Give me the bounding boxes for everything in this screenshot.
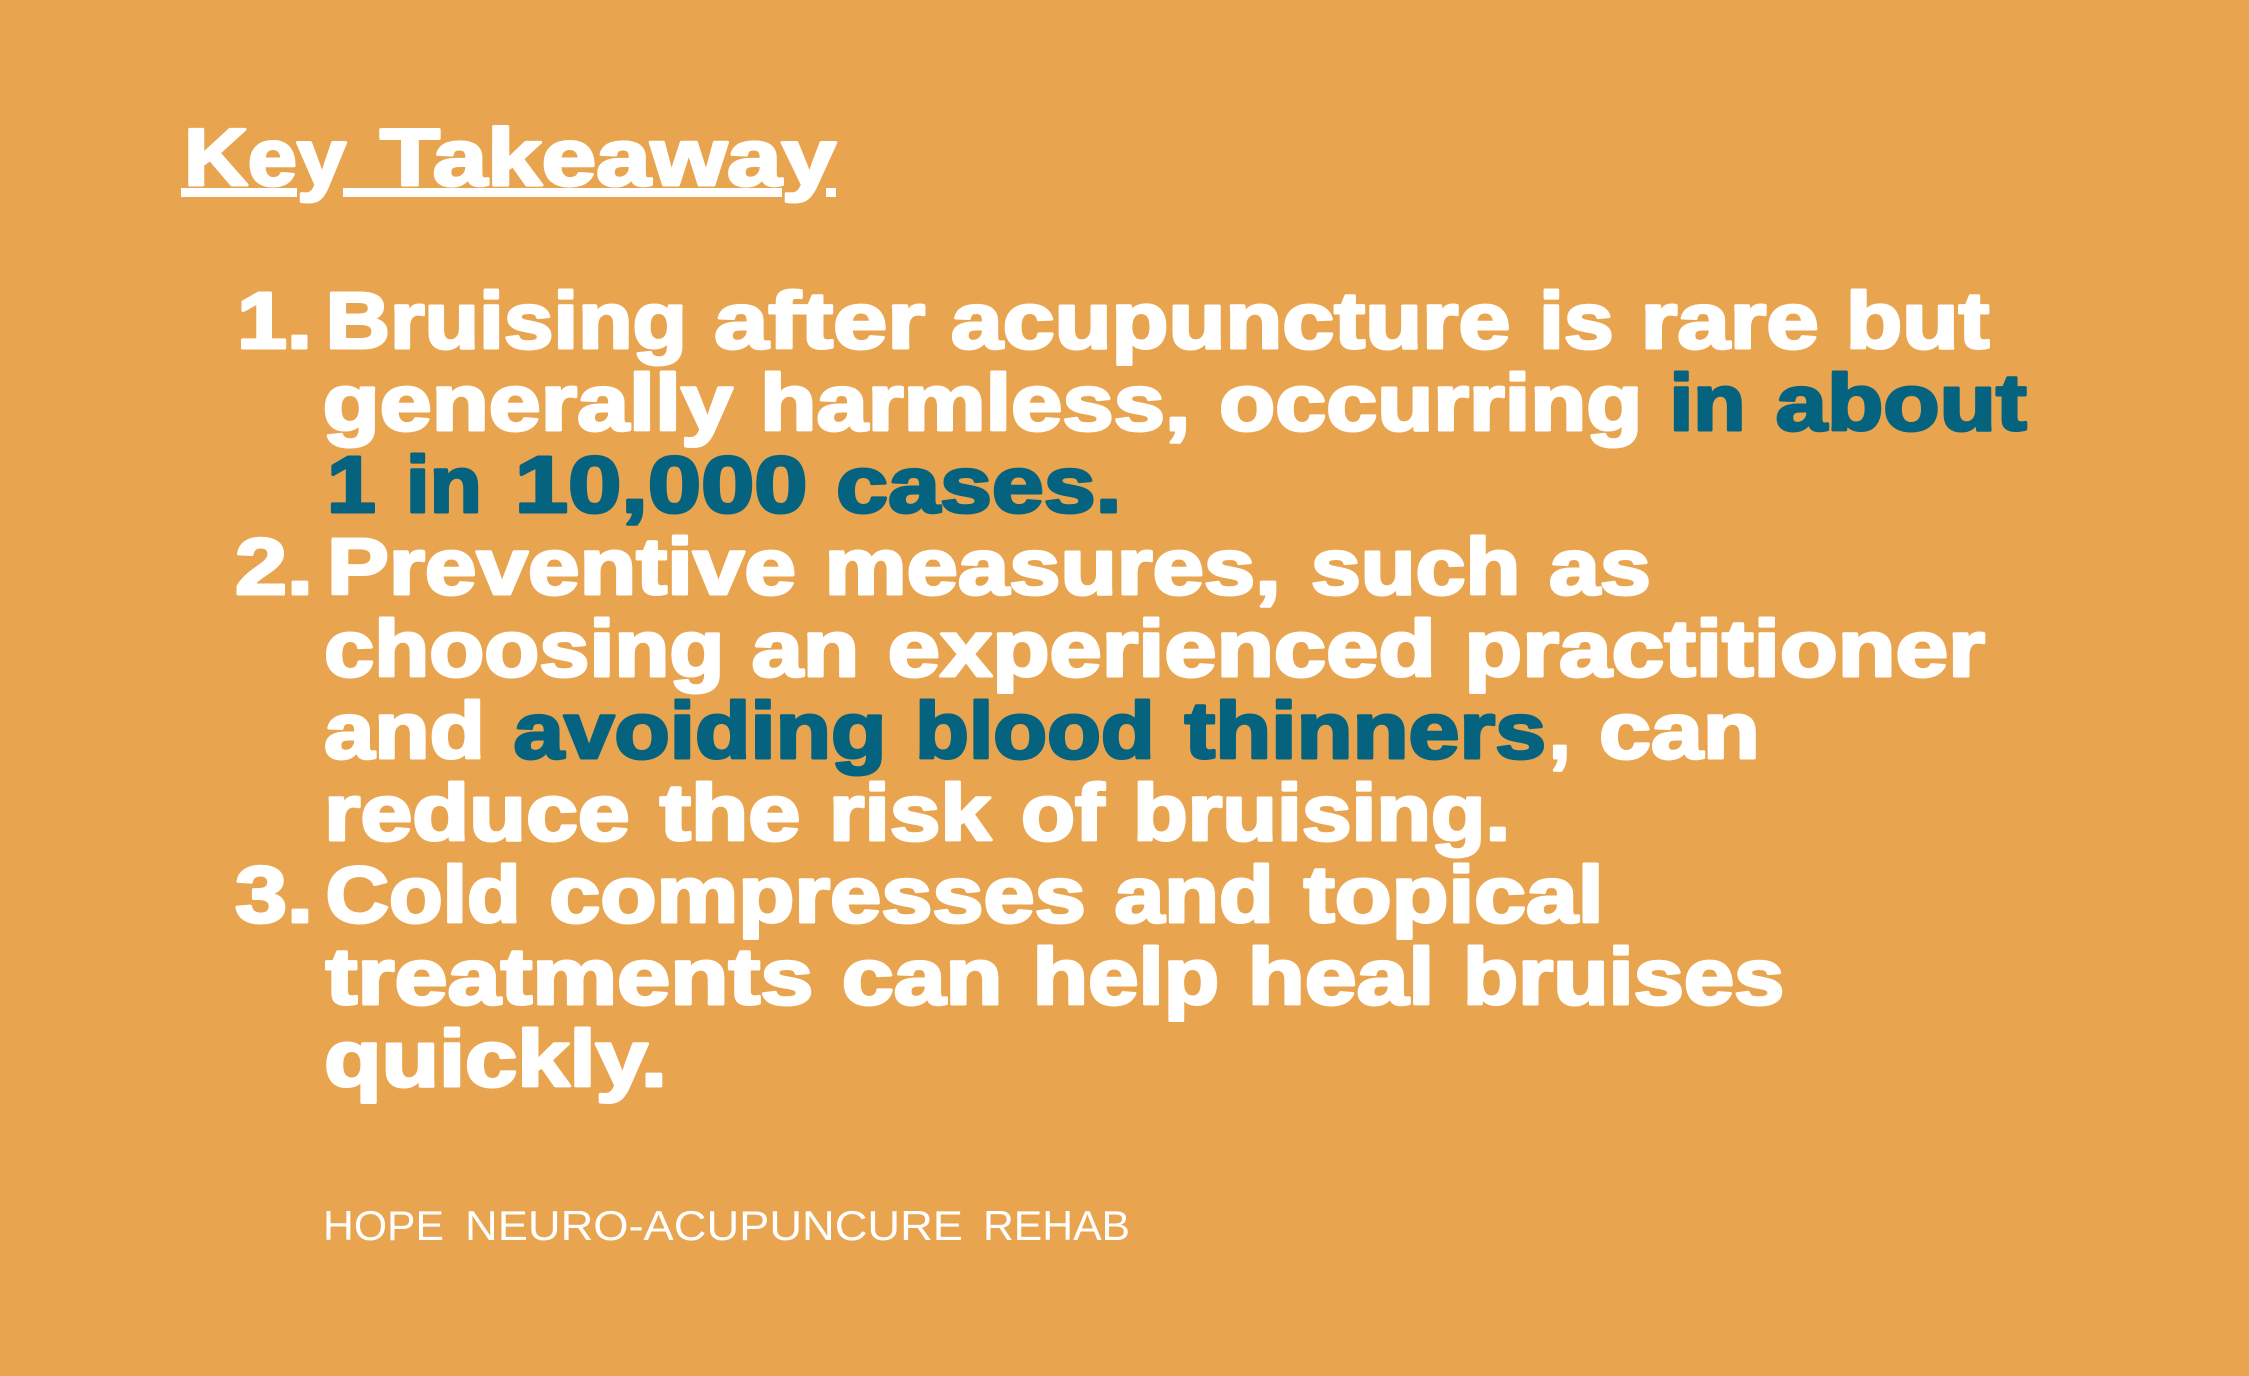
list item 2: as bbox=[1549, 522, 1651, 611]
list item 2: choosing bbox=[324, 604, 724, 693]
list item 2: bruising. bbox=[1133, 768, 1510, 857]
title: Key Takeaway: Takeaway bbox=[380, 113, 836, 203]
list item 1 bbox=[237, 276, 2027, 529]
list item 2: an bbox=[752, 604, 859, 693]
list item 2: risk bbox=[829, 768, 992, 857]
list item 2: of bbox=[1021, 768, 1105, 857]
list item 2: experienced bbox=[888, 604, 1436, 693]
list item 1: in bbox=[406, 440, 482, 529]
list item 3: heal bbox=[1248, 932, 1434, 1021]
list item 1: in bbox=[1670, 358, 1746, 447]
list item 1: cases. bbox=[836, 440, 1122, 529]
list item 1: 10,000 bbox=[515, 440, 808, 529]
list item 3: 3. bbox=[235, 850, 313, 939]
list item 2: , bbox=[1549, 686, 1570, 775]
footer: organisation name: REHAB bbox=[983, 1202, 1130, 1249]
list item 2: thinners bbox=[1185, 686, 1546, 775]
list item 3: help bbox=[1033, 932, 1219, 1021]
footer: organisation name: NEURO-ACUPUNCURE bbox=[465, 1202, 963, 1249]
list item 1: occurring bbox=[1219, 358, 1642, 447]
list item 1: after bbox=[714, 276, 925, 365]
list item 2: practitioner bbox=[1464, 604, 1985, 693]
list item 1: generally bbox=[323, 358, 733, 447]
list item 3: treatments bbox=[326, 932, 813, 1021]
list item 1: acupuncture bbox=[951, 276, 1510, 365]
list item 1: 1 bbox=[327, 440, 376, 529]
list item 2: can bbox=[1599, 686, 1760, 775]
list item 1: but bbox=[1846, 276, 1989, 365]
footer: organisation name: HOPE bbox=[323, 1202, 444, 1249]
list item 2: and bbox=[324, 686, 485, 775]
list item 3: compresses bbox=[549, 850, 1086, 939]
title: Key Takeaway: Key bbox=[184, 113, 346, 203]
title: Key Takeaway bbox=[181, 113, 836, 203]
list item 2: Preventive bbox=[327, 522, 796, 611]
list item 3: topical bbox=[1304, 850, 1604, 939]
list item 3: Cold bbox=[326, 850, 521, 939]
list item 1: harmless, bbox=[760, 358, 1190, 447]
list item 1: about bbox=[1776, 358, 2027, 447]
list item 3: can bbox=[842, 932, 1002, 1021]
list item 1: 1. bbox=[237, 276, 312, 365]
list item 3: quickly. bbox=[324, 1014, 667, 1103]
list item 1: is bbox=[1539, 276, 1614, 365]
footer: organisation name bbox=[323, 1202, 1130, 1249]
list item 2: blood bbox=[915, 686, 1155, 775]
list item 1: rare bbox=[1641, 276, 1819, 365]
list item 2: avoiding bbox=[514, 686, 886, 775]
list item 2 bbox=[235, 522, 1985, 857]
list item 1: Bruising bbox=[326, 276, 687, 365]
list item 2: such bbox=[1311, 522, 1520, 611]
list item 2: the bbox=[660, 768, 800, 857]
list item 2: measures, bbox=[825, 522, 1281, 611]
list item 3: bruises bbox=[1463, 932, 1784, 1021]
list item 3: and bbox=[1114, 850, 1274, 939]
list item 2: reduce bbox=[324, 768, 630, 857]
list item 3 bbox=[235, 850, 1784, 1103]
list item 2: 2. bbox=[235, 522, 313, 611]
